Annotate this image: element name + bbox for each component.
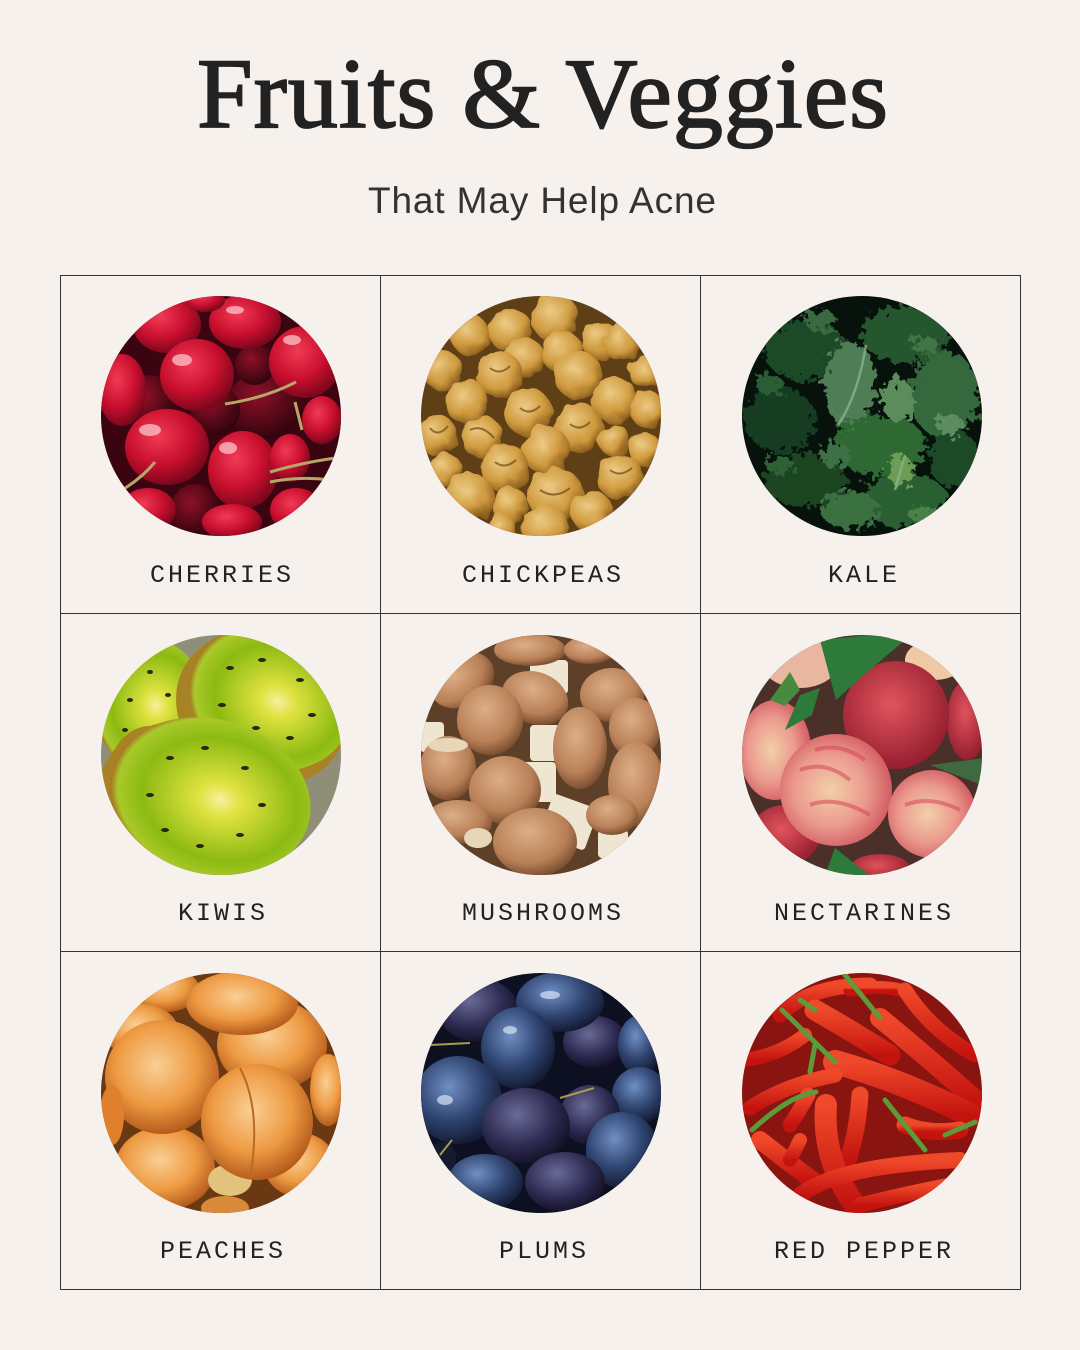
icon: mushrooms photo xyxy=(420,634,664,876)
icon: red peppers photo xyxy=(740,972,984,1216)
label: chickpeas: CHICKPEAS xyxy=(462,561,624,590)
icon: chickpeas photo xyxy=(417,294,666,550)
icon: plums photo xyxy=(414,972,668,1214)
subtitle: That May Help Acne xyxy=(368,180,716,221)
title: Fruits & Veggies xyxy=(197,38,888,149)
icon: kale photo xyxy=(740,295,984,539)
label: kiwis: KIWIS xyxy=(178,899,268,928)
grid of food cells xyxy=(60,276,1020,1290)
label: plums: PLUMS xyxy=(499,1237,589,1266)
icon: nectarines photo xyxy=(739,632,987,882)
label: cherries: CHERRIES xyxy=(150,561,294,590)
icon: kiwis photo xyxy=(101,635,341,875)
label: red pepper: RED PEPPER xyxy=(774,1237,954,1266)
label: peaches: PEACHES xyxy=(160,1237,286,1266)
label: mushrooms: MUSHROOMS xyxy=(462,899,624,928)
icon: cherries photo xyxy=(98,288,342,540)
label: kale: KALE xyxy=(828,561,900,590)
icon: peaches photo xyxy=(100,968,346,1220)
label: nectarines: NECTARINES xyxy=(774,899,954,928)
